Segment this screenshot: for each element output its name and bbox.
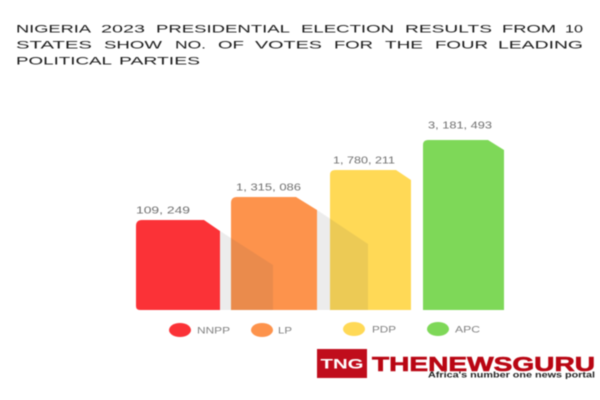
bar: PDP — [330, 170, 411, 310]
title — [16, 24, 583, 68]
legend: APC: APC — [455, 324, 481, 334]
title: FOUR — [435, 40, 488, 52]
logo wordmark: THENEWSGURU — [372, 354, 595, 376]
legend: LP — [251, 323, 292, 337]
legend: PDP: PDP — [372, 324, 396, 334]
title: 2023 — [101, 24, 145, 36]
legend: APC — [427, 322, 481, 336]
bar: APC — [423, 140, 504, 310]
logo tagline: Africa's number one news portal — [428, 370, 595, 380]
logo badge: TNG — [320, 356, 364, 372]
title: FOR — [334, 40, 373, 52]
title: LEADING — [498, 40, 583, 52]
logo: TheNewsGuru — [317, 349, 595, 380]
title: FROM — [502, 24, 556, 36]
value: PDP: 1, 780, 211 — [333, 156, 395, 166]
value: LP: 1, 315, 086 — [236, 182, 302, 194]
shadow: LP bar — [317, 210, 368, 310]
bar: LP — [231, 197, 317, 310]
legend: NNPP: NNPP — [197, 326, 230, 336]
legend: PDP — [343, 322, 396, 336]
title: VOTES — [255, 40, 322, 52]
title: 10 — [565, 24, 583, 36]
bar chart — [136, 120, 504, 310]
title: STATES — [16, 40, 92, 52]
title: SHOW — [104, 40, 163, 52]
value: APC: 3, 181, 493 — [428, 120, 493, 132]
title: PRESIDENTIAL — [156, 24, 290, 36]
title: POLITICAL — [16, 56, 112, 68]
title: PARTIES — [119, 56, 200, 68]
legend: LP: LP — [278, 326, 292, 336]
title: RESULTS — [405, 24, 492, 36]
legend — [169, 322, 481, 337]
title: OF — [218, 40, 245, 52]
title: NO. — [175, 40, 206, 52]
title: ELECTION — [301, 24, 394, 36]
title: NIGERIA — [16, 24, 92, 36]
shadow: NNPP bar — [220, 231, 273, 310]
logo badge — [317, 349, 367, 378]
bar: NNPP — [136, 220, 220, 310]
title: THE — [385, 40, 423, 52]
legend: NNPP — [169, 323, 230, 337]
value: NNPP: 109, 249 — [136, 206, 190, 216]
